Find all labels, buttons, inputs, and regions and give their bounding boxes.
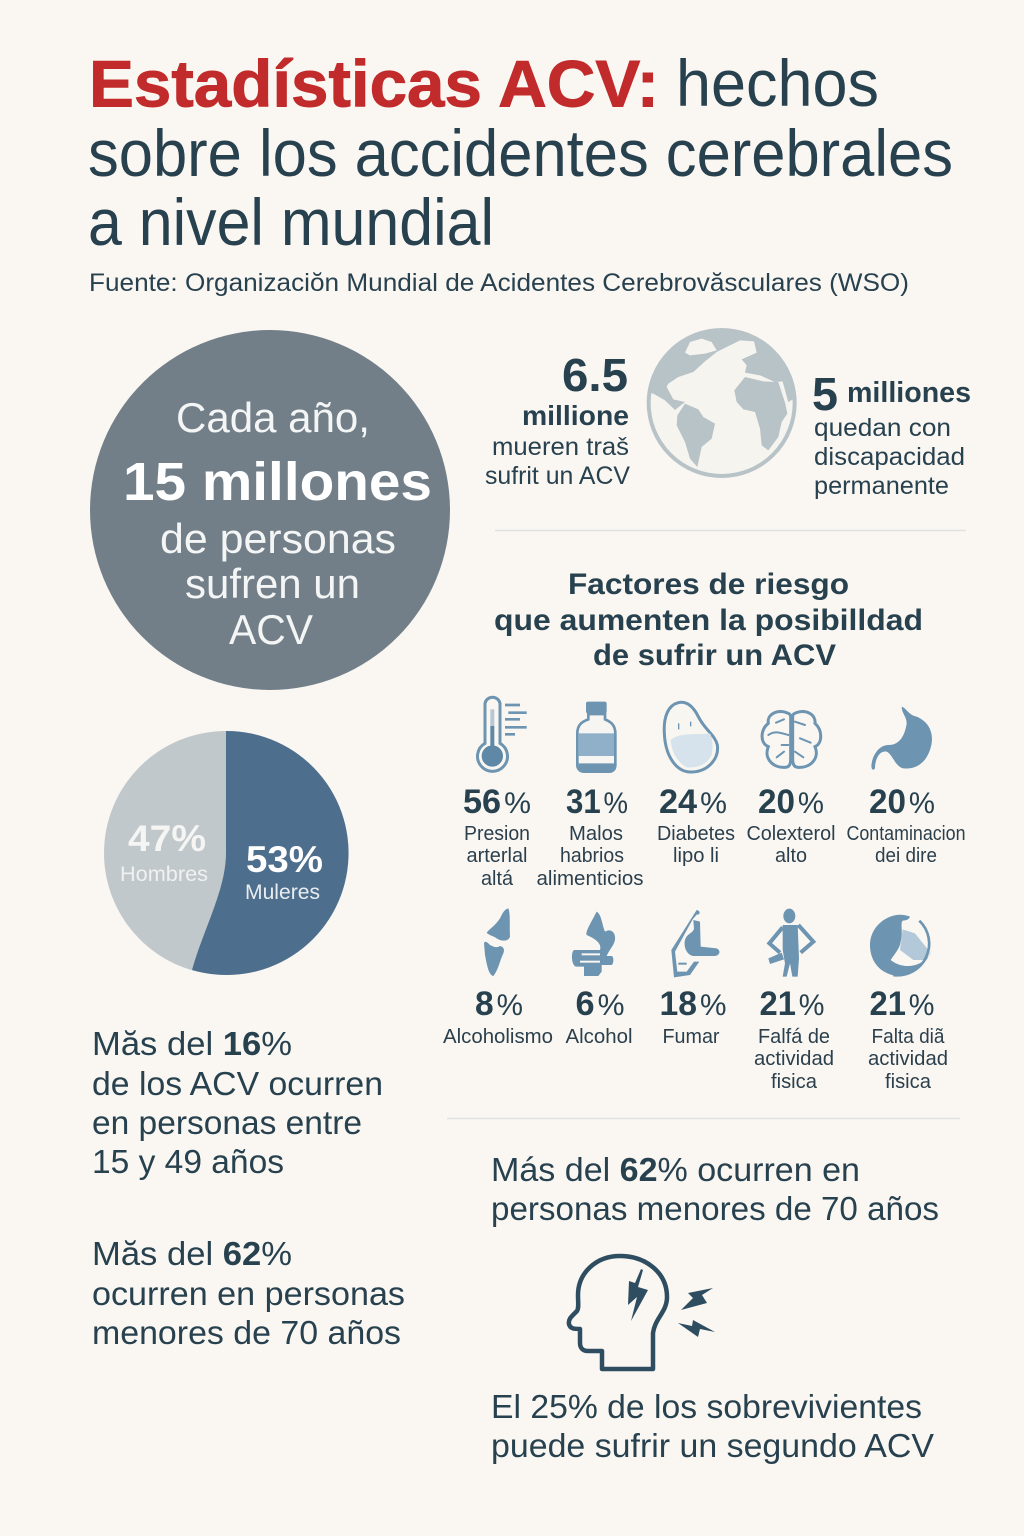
heading: risk factors: de sufrir un ACV bbox=[593, 639, 836, 672]
risk factor: lack of physical activity: Falfá de bbox=[758, 1026, 830, 1048]
panel: big circle 15 millones: ACV bbox=[229, 606, 313, 653]
icon: standing figure bbox=[768, 909, 813, 977]
risk factor: high blood pressure bbox=[463, 697, 531, 890]
stat: 5 million disabled: quedan con bbox=[814, 414, 951, 442]
panel: big circle 15 millones: sufren un bbox=[185, 560, 360, 607]
pie chart: men and women bbox=[104, 731, 349, 975]
risk factor: lack of daily activity: Falta diã bbox=[872, 1026, 945, 1048]
pie chart: men and women: Hombres bbox=[120, 863, 208, 886]
risk factor: poor diet: Malos bbox=[569, 823, 623, 845]
heading: risk factors bbox=[494, 568, 923, 672]
panel: big circle 15 millones bbox=[90, 330, 450, 690]
icon: stomach bbox=[871, 707, 932, 770]
heading: risk factors: que aumenten la posibilldad bbox=[494, 604, 923, 637]
risk factor: alcoholism bbox=[443, 908, 553, 1048]
risk factor: poor diet bbox=[536, 702, 644, 890]
risk factor: lack of daily activity: fisica bbox=[885, 1071, 932, 1093]
risk factor: diabetes: Diabetes bbox=[657, 823, 735, 845]
risk factor: poor diet: 31% bbox=[566, 783, 628, 821]
risk factor: lack of daily activity: 21% bbox=[870, 985, 934, 1023]
icon: sphere bbox=[870, 915, 932, 976]
risk factor: diabetes: 24% bbox=[659, 783, 727, 821]
risk factor: alcohol bbox=[566, 912, 632, 1048]
text block: 16 percent: en personas entre bbox=[92, 1104, 362, 1141]
risk factor: smoking: Fumar bbox=[662, 1026, 720, 1048]
icon: globe bbox=[649, 330, 797, 476]
risk factor: air pollution: 20% bbox=[869, 783, 935, 821]
risk factor: high blood pressure: Presion bbox=[464, 823, 530, 845]
stat: 6.5 million deaths: sufrit un ACV bbox=[485, 462, 630, 490]
stat: 5 million disabled: permanente bbox=[814, 472, 949, 500]
risk factor: high cholesterol: Colexterol bbox=[746, 823, 836, 845]
risk factor: diabetes bbox=[657, 702, 735, 867]
risk factor: poor diet: alimenticios bbox=[536, 868, 644, 890]
icon: bottle bbox=[577, 702, 615, 772]
heading: risk factors: Factores de riesgo bbox=[568, 568, 849, 601]
risk factor: high blood pressure: 56% bbox=[463, 783, 531, 821]
risk factor: high cholesterol: 20% bbox=[758, 783, 824, 821]
stat: 5 million disabled: discapacidad bbox=[814, 443, 965, 471]
pie chart: men and women: 47% bbox=[128, 818, 206, 859]
icon: drop shape bbox=[664, 702, 718, 772]
stat: 6.5 million deaths: 6.5 bbox=[562, 349, 628, 401]
risk factor: smoking: 18% bbox=[660, 985, 726, 1023]
pie chart: men and women: Muleres bbox=[245, 881, 320, 904]
risk factor: high cholesterol bbox=[746, 712, 836, 867]
source line: Fuente: Organizaciŏn Mundial de Acidentes Cerebrovăsculares (WSO) bbox=[89, 269, 909, 297]
text block: 62 percent left: menores de 70 años bbox=[92, 1314, 401, 1351]
text block: 62 percent right bbox=[491, 1151, 939, 1227]
risk factor: air pollution: dei dire bbox=[875, 845, 937, 867]
stat: 5 million disabled bbox=[812, 368, 971, 500]
text block: 62 percent left bbox=[92, 1235, 405, 1351]
icon: brain bbox=[762, 712, 821, 767]
risk factor: diabetes: lipo li bbox=[673, 845, 719, 867]
pie chart: men and women: 53% bbox=[246, 839, 323, 880]
panel: big circle 15 millones: 15 millones bbox=[123, 452, 432, 512]
risk factor: lack of daily activity: actividad bbox=[868, 1048, 948, 1070]
title: a nivel mundial bbox=[88, 185, 494, 259]
risk factor: poor diet: habrios bbox=[560, 845, 624, 867]
panel: big circle 15 millones: de personas bbox=[160, 515, 396, 562]
risk factor: lack of physical activity: fisica bbox=[771, 1071, 818, 1093]
risk factor: high blood pressure: arterlal bbox=[466, 845, 528, 867]
icon: intestine bbox=[572, 912, 615, 976]
text block: 62 percent left: ocurren en personas bbox=[92, 1275, 405, 1312]
risk factor: alcohol: 6% bbox=[576, 985, 624, 1023]
icon: thermometer bbox=[477, 697, 527, 771]
title: hechos bbox=[676, 46, 879, 120]
icon: seated figure bbox=[671, 910, 719, 977]
text block: 62 percent right: personas menores de 70 años bbox=[491, 1190, 939, 1227]
risk factor: alcoholism: Alcoholismo bbox=[443, 1026, 553, 1048]
stat: 6.5 million deaths: millione bbox=[522, 400, 629, 431]
title: sobre los accidentes cerebrales bbox=[88, 116, 953, 190]
icon: joint bbox=[484, 908, 510, 976]
text block: 62 percent left: Măs del 62% bbox=[92, 1235, 292, 1272]
stat: 5 million disabled: 5 bbox=[812, 368, 838, 420]
text block: second stroke: El 25% de los sobrevivientes bbox=[491, 1388, 922, 1425]
title: Estadísticas ACV: bbox=[89, 46, 659, 120]
risk factor: smoking bbox=[660, 910, 726, 1048]
risk factor: air pollution: Contaminacion bbox=[846, 823, 966, 845]
risk factor: alcoholism: 8% bbox=[475, 985, 523, 1023]
text block: 16 percent: Măs del 16% bbox=[92, 1025, 292, 1062]
icon: head with lightning bbox=[569, 1256, 715, 1369]
risk factor: lack of daily activity bbox=[868, 915, 948, 1093]
risk factor: lack of physical activity: actividad bbox=[754, 1048, 834, 1070]
risk factor: high cholesterol: alto bbox=[775, 845, 807, 867]
text block: second stroke bbox=[491, 1388, 934, 1464]
risk factor: alcohol: Alcohol bbox=[566, 1026, 632, 1048]
risk factor: lack of physical activity bbox=[754, 909, 834, 1093]
risk factor: high blood pressure: altá bbox=[481, 868, 514, 890]
risk factor: air pollution bbox=[846, 707, 966, 867]
text block: 16 percent: 15 y 49 años bbox=[92, 1143, 284, 1180]
title bbox=[88, 46, 953, 259]
text block: second stroke: puede sufrir un segundo ACV bbox=[491, 1427, 934, 1464]
stat: 6.5 million deaths: mueren traš bbox=[492, 433, 629, 461]
text block: 62 percent right: Más del 62% ocurren en bbox=[491, 1151, 860, 1188]
text block: 16 percent bbox=[92, 1025, 383, 1180]
text block: 16 percent: de los ACV ocurren bbox=[92, 1065, 383, 1102]
panel: big circle 15 millones: Cada año, bbox=[176, 394, 370, 441]
stat: 6.5 million deaths bbox=[485, 349, 630, 490]
stat: 5 million disabled: milliones bbox=[847, 377, 971, 409]
risk factor: lack of physical activity: 21% bbox=[760, 985, 824, 1023]
